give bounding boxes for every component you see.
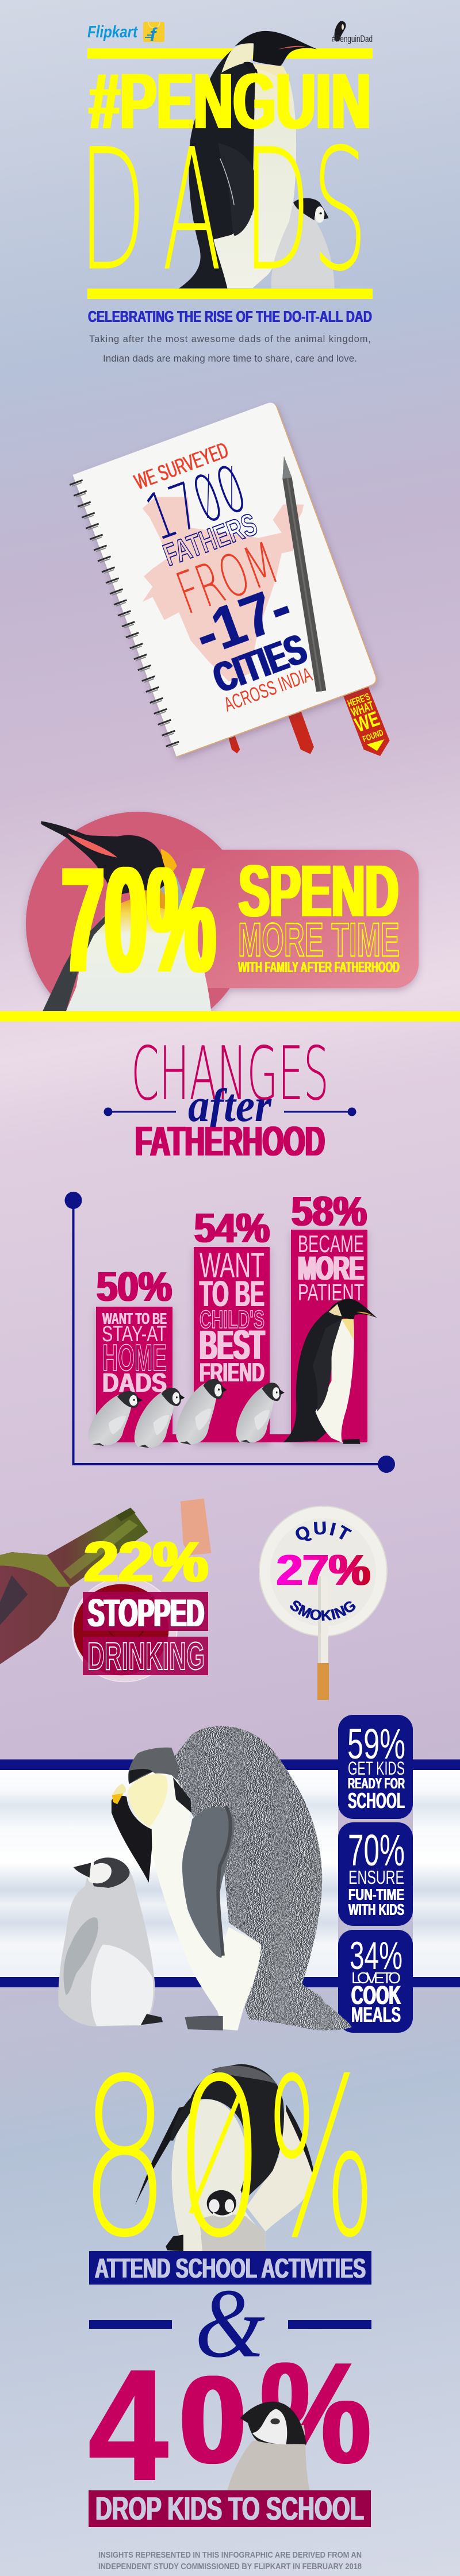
text: quit 27%: 27%: [277, 1546, 370, 1594]
footnote: INSIGHTS REPRESENTED IN THIS INFOGRAPHIC ARE DERIVED FROM AN: [98, 2550, 362, 2560]
card: 59%: READY FOR: [348, 1775, 405, 1792]
bar: 54%: WANT: [200, 1246, 264, 1285]
illustration: wine bottle, cork and glass: [0, 1499, 211, 1682]
bottom yellow bar: [87, 289, 373, 299]
bar: 54%: FRIEND: [200, 1357, 264, 1387]
card: 59%: SCHOOL: [348, 1789, 405, 1813]
snow photo band: [0, 1759, 460, 1987]
intro text: [89, 334, 371, 364]
bar: 58%: [291, 1189, 367, 1442]
heading: changes after fatherhood: after: [188, 1079, 272, 1131]
card: 70%: [338, 1822, 413, 1926]
intro text: Taking after the most awesome dads of the animal kingdom,: [89, 334, 371, 344]
notebook text: survey statement: [132, 438, 315, 716]
illustration: emperor penguin and chick: [179, 31, 335, 289]
bar: 50%: DADS: [102, 1368, 167, 1398]
card: 34%: [338, 1930, 413, 2033]
text: quit 27%: QUIT: [296, 1521, 352, 1541]
text: quit 27%: [277, 1521, 370, 1594]
stat: 40%: 0: [180, 2350, 246, 2489]
bar: 58%: 58%: [292, 1189, 367, 1235]
subtitle: CELEBRATING THE RISE OF THE DO-IT-ALL DAD: [88, 308, 372, 325]
stat: 22%: 22%: [84, 1530, 208, 1594]
logo: Flipkart: Flipkart: [87, 23, 138, 41]
footnote: [98, 2550, 362, 2571]
card: 34%: COOK: [351, 1980, 401, 2010]
bar: 54%: 54%: [194, 1206, 270, 1251]
stat: 40%: 4: [89, 2336, 169, 2514]
card: 70%: WITH KIDS: [348, 1901, 404, 1918]
ampersand divider: &: [195, 2269, 265, 2378]
bar: 58%: MORE: [298, 1250, 364, 1287]
bar: 58%: BECAME: [298, 1230, 364, 1257]
card: 59%: GET KIDS: [348, 1758, 405, 1779]
logo: #PenguinDad: [332, 21, 373, 44]
card: 34%: LOVE TO: [351, 1969, 401, 1987]
label: stopped drinking: [83, 1591, 208, 1678]
stat: 40%: [89, 2333, 371, 2514]
icon: pencil: [282, 456, 326, 692]
spiral binding: [76, 482, 175, 750]
stat: 40%: %: [260, 2333, 371, 2494]
bookmark text: [346, 691, 385, 744]
card: 59%: 59%: [347, 1720, 405, 1768]
stat: 80%: 80: [79, 2032, 264, 2286]
notebook text: survey statement: FATHERS: [159, 507, 262, 573]
illustration: chick: [227, 2402, 309, 2490]
card: 70%: FUN-TIME: [348, 1886, 404, 1903]
logo: Flipkart: [87, 22, 164, 45]
title: DADS: DADS: [79, 113, 367, 308]
text: smoking: SMOKING: [290, 1600, 356, 1621]
banner: attend school activities: [89, 2251, 371, 2285]
chick: [58, 1857, 163, 2026]
ampersand divider: [89, 2269, 371, 2378]
stat: 70%: 70%: [62, 836, 216, 1004]
card: 70%: ENSURE: [348, 1867, 404, 1888]
notebook text: survey statement: WE SURVEYED: [132, 438, 232, 494]
india map: [142, 456, 326, 692]
stat: 80%: [79, 2032, 376, 2286]
illustration: king penguin: [41, 821, 211, 1011]
illustration: ribbons: [228, 684, 390, 756]
bar: 54%: BEST: [200, 1323, 264, 1368]
top yellow bar: [87, 48, 373, 59]
label: stopped drinking: STOPPED: [88, 1591, 204, 1635]
bar: 54%: [194, 1206, 270, 1442]
bookmark text: WHAT: [349, 698, 376, 720]
card: 34%: 34%: [350, 1934, 402, 1978]
notebook text: survey statement: 1700: [137, 451, 256, 555]
footnote: INDEPENDENT STUDY COMMISSIONED BY FLIPKART IN FEBRUARY 2018: [98, 2562, 362, 2571]
yellow band: [0, 1011, 460, 1022]
illustration: penguin sheltering chick: [135, 2064, 315, 2251]
icon: cigarette: [317, 1576, 329, 1700]
bar: 54%: TO BE: [200, 1274, 264, 1314]
illustration: emperor penguin with chick on snow: [58, 1726, 352, 2030]
base strip: [96, 1434, 367, 1442]
label: stopped drinking: DRINKING: [87, 1634, 205, 1678]
heading: changes after fatherhood: FATHERHOOD: [135, 1119, 325, 1165]
illustration: ashtray: [259, 1506, 387, 1636]
intro text: Indian dads are making more time to share, care and love.: [103, 354, 357, 364]
bar: 50%: [96, 1264, 172, 1442]
bookmark text: FOUND: [362, 728, 385, 744]
bookmark text: WE: [352, 707, 382, 737]
panel: 70 percent backdrop: [26, 812, 419, 1036]
card: 70%: 70%: [348, 1826, 405, 1875]
panel: notebook: [72, 401, 379, 758]
text: spend more time: [238, 850, 400, 976]
bar: 58%: PATIENT: [298, 1279, 364, 1306]
notebook text: survey statement: -17-: [186, 573, 300, 669]
bar: 50%: HOME: [102, 1337, 167, 1379]
bar chart: [96, 1189, 367, 1442]
bar: 50%: 50%: [97, 1264, 172, 1310]
bar: 50%: STAY-AT: [102, 1322, 167, 1346]
stat: 80%: %: [266, 2032, 376, 2286]
stat cards: [338, 1715, 413, 2033]
chart axes: [64, 1192, 395, 1473]
heading: changes after fatherhood: [105, 1031, 355, 1165]
notebook text: survey statement: CITIES: [208, 626, 312, 702]
bookmark text: HERE'S: [346, 691, 371, 709]
bar: 54%: CHILD'S: [200, 1306, 264, 1334]
illustration: chicks and emperor walking: [88, 1299, 377, 1448]
notebook text: survey statement: ACROSS INDIA: [221, 663, 315, 716]
notebook text: survey statement: FROM: [168, 529, 286, 628]
logo: #PenguinDad: #PenguinDad: [332, 33, 373, 44]
card: 59%: [338, 1715, 413, 1819]
bar: 50%: WANT TO BE: [102, 1310, 167, 1327]
icon: Flipkart bag: f: [150, 24, 158, 45]
card: 34%: MEALS: [351, 2003, 401, 2026]
